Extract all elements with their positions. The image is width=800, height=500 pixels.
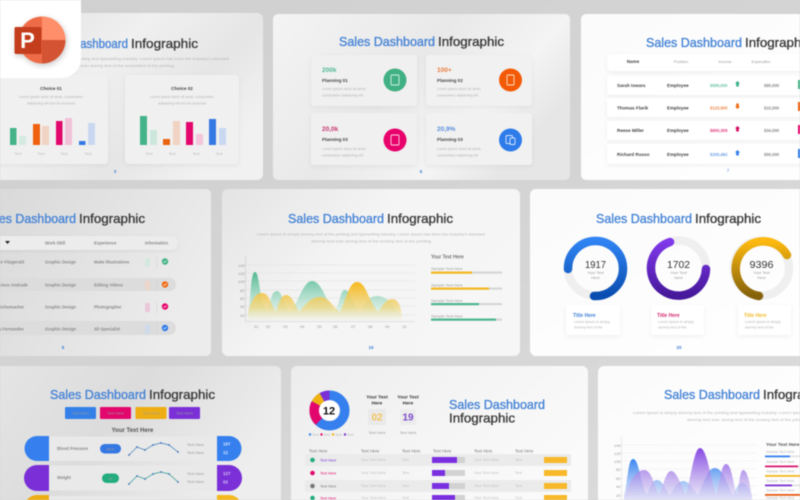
card: planning 02: Lorem ipsum dolor sit amet, bbox=[437, 87, 481, 91]
page number 8: 8 bbox=[62, 345, 65, 350]
bar chart: choice 01: Text bbox=[14, 151, 23, 156]
buttons row: Text Here bbox=[107, 410, 125, 416]
card: title here yellow: Title Here bbox=[744, 313, 767, 319]
card: title here yellow: Lorem Ipsum is simply bbox=[745, 320, 781, 324]
row: Fernandes bbox=[0, 321, 176, 335]
area chart: 80 bbox=[616, 467, 621, 472]
progress list: Sample Text Here bbox=[766, 479, 794, 483]
card: title here pink: Title Here bbox=[657, 313, 680, 319]
title: slide area: Sales Dashboard bbox=[664, 388, 760, 402]
title: slide 6 bbox=[339, 35, 504, 49]
row: Richard Russo bbox=[607, 144, 800, 164]
row: blood pressure: Text Here bbox=[187, 450, 205, 455]
table header: Income bbox=[718, 59, 732, 64]
panel: employee income table slide bbox=[581, 14, 800, 180]
icon: pink circle tablet bbox=[384, 128, 406, 152]
table: Text bbox=[402, 484, 410, 488]
area chart: 03 bbox=[283, 324, 288, 329]
row: Sarah Iswara bbox=[607, 76, 800, 95]
panel: planning cards slide bbox=[273, 14, 570, 180]
row: Richard Russo: Richard Russo bbox=[617, 152, 650, 157]
panel: area chart slide bbox=[222, 189, 520, 356]
subtitle text: dummy text ever during text of the scramy text of the printing bbox=[687, 418, 800, 422]
row: Fernandes: 3D Specialist bbox=[94, 326, 121, 332]
row: blood pressure: 197 bbox=[223, 442, 231, 446]
title: slide 20 bbox=[596, 212, 761, 226]
logo badge: PowerPoint bbox=[0, 0, 81, 78]
title: slide 14: Sales Dashboard bbox=[288, 212, 384, 226]
card: planning 01: Planning 01 bbox=[322, 78, 348, 83]
subtitle text bbox=[257, 232, 485, 244]
area chart: 06 bbox=[333, 324, 338, 329]
donut: 9396: Here bbox=[757, 275, 767, 280]
subtitle text bbox=[633, 411, 800, 422]
donut: 9396: 9396 bbox=[750, 260, 774, 271]
legend: Text bbox=[312, 433, 319, 437]
card: choice 01: adipiscing elit sed do eiusmod bbox=[27, 102, 75, 106]
legend bbox=[309, 433, 354, 437]
panel: purple area chart slide bbox=[598, 366, 800, 500]
row: Thomas Flarik: Thomas Flarik bbox=[617, 106, 649, 110]
icon: orange circle phone bbox=[499, 68, 522, 92]
area chart: 10 bbox=[402, 324, 407, 329]
stat: 19: Here bbox=[403, 400, 414, 406]
area chart: 140 bbox=[614, 443, 621, 448]
panel: team skills table slide bbox=[0, 189, 211, 356]
area chart: 40 bbox=[616, 484, 621, 489]
icon: sort triangle bbox=[5, 241, 10, 244]
buttons row bbox=[65, 407, 200, 419]
table: Text Here bbox=[320, 458, 336, 462]
stat: 19: Your Text bbox=[397, 394, 419, 400]
bar chart: choice 02: Text bbox=[192, 151, 201, 156]
table header: Expenditur bbox=[751, 59, 771, 64]
title: slide 7: Sales Dashboard bbox=[646, 36, 742, 50]
row: blood pressure: Blood Pressure bbox=[57, 446, 89, 451]
row: weight: 127 bbox=[223, 471, 231, 476]
title: slide 6: Infographic bbox=[438, 35, 504, 49]
row: Schumacher: Graphic Design bbox=[45, 304, 76, 310]
card: choice 01: Choice 01 bbox=[40, 86, 62, 91]
donut: 1917: 1917 bbox=[585, 260, 606, 271]
donut: 1702 bbox=[651, 240, 706, 296]
card: choice 01 bbox=[0, 75, 108, 164]
progress list: Sample Text Here bbox=[431, 298, 463, 303]
bar chart: choice 01: Text bbox=[37, 151, 46, 156]
table header: Name bbox=[627, 59, 640, 64]
card: planning 03: Lorem ipsum dolor sit amet, bbox=[322, 147, 366, 151]
title: two lines bbox=[449, 398, 545, 426]
area chart: 60 bbox=[240, 296, 245, 301]
line chart: blood pressure bbox=[128, 442, 179, 456]
table: Text Here bbox=[361, 448, 380, 454]
title: slide metrics bbox=[50, 388, 215, 402]
progress list: Your Text Here bbox=[431, 254, 464, 260]
donut chart: 12: 12 bbox=[323, 406, 335, 418]
table: Text Here bbox=[474, 448, 493, 454]
area chart: 60 bbox=[616, 476, 621, 481]
card: planning 04: Lorem ipsum dolor sit amet, bbox=[437, 147, 481, 151]
row: Fitzgerald bbox=[0, 257, 168, 268]
row: weight: 45 bbox=[108, 476, 113, 481]
row: Sarah Iswara: Sarah Iswara bbox=[617, 83, 646, 88]
subtitle text: text ever during text of the scrambled of the printing bbox=[72, 64, 174, 68]
table: Text bbox=[515, 496, 523, 500]
area chart: 140 bbox=[238, 263, 245, 268]
bar chart: choice 01 bbox=[10, 118, 95, 156]
area chart: 01 bbox=[254, 324, 259, 329]
subtitle text: printing and typesetting industry. Lorem Ipsum has been the industry's standard bbox=[76, 57, 229, 61]
progress list bbox=[765, 442, 800, 500]
card: planning 04: 20,9% bbox=[437, 126, 456, 133]
bar chart: choice 02: Text bbox=[168, 151, 177, 156]
row: Fitzgerald: Graphic Design bbox=[45, 260, 76, 264]
row: Schumacher bbox=[0, 302, 168, 313]
area chart: 20 bbox=[240, 313, 245, 318]
card: choice 02 bbox=[125, 75, 239, 164]
title: two lines: Infographic bbox=[449, 412, 515, 426]
table: Text Here bbox=[402, 448, 421, 454]
card: planning 02: consectetur adipiscing elit bbox=[437, 94, 478, 98]
area chart: 80 bbox=[240, 288, 245, 293]
area chart: 08 bbox=[368, 324, 373, 329]
donut: 1917 bbox=[568, 240, 623, 296]
row: Reese Miller: $600,309 bbox=[710, 128, 728, 133]
table: Your Text Here bbox=[474, 471, 499, 475]
stat: 02: 02 bbox=[371, 412, 383, 424]
table: Your Text Here bbox=[361, 484, 386, 488]
donut: 1917: Here bbox=[591, 275, 601, 280]
title: slide 20: Sales Dashboard bbox=[596, 212, 692, 226]
progress list: Sample Text Here bbox=[766, 450, 794, 454]
row: weight: Text Here bbox=[187, 471, 205, 476]
row: Sarah Iswara: Employee bbox=[667, 83, 689, 88]
table: Text Here bbox=[320, 484, 336, 488]
panel: health metrics slide bbox=[0, 366, 281, 500]
stat: 02 bbox=[366, 394, 388, 435]
page number 20: 20 bbox=[676, 345, 682, 350]
card: planning 03 bbox=[311, 113, 417, 165]
card: title here blue: dummy text of the bbox=[574, 326, 603, 330]
row: Fernandes: Graphic Design bbox=[45, 326, 76, 332]
area chart: 120 bbox=[238, 271, 245, 276]
card: planning 01: consectetur adipiscing elit bbox=[322, 94, 363, 98]
row: third metric bbox=[24, 495, 242, 500]
progress list: Your Text Here bbox=[766, 442, 800, 448]
panel: choice bar charts slide bbox=[0, 13, 263, 180]
title: slide 20: Infographic bbox=[695, 212, 761, 226]
panel: donut and table slide bbox=[291, 366, 588, 500]
table: Your Text Here bbox=[361, 496, 386, 500]
card: title here blue: Lorem Ipsum is simply bbox=[574, 320, 610, 324]
row: Richard Russo: $50,000 bbox=[764, 152, 780, 157]
row: Andrade bbox=[0, 278, 176, 291]
table header pill bbox=[0, 236, 178, 250]
card: planning 04 bbox=[426, 113, 532, 165]
table bbox=[305, 448, 571, 500]
subtitle text: dummy text ever during text of the scramy text of the printing bbox=[311, 240, 431, 244]
area chart bbox=[614, 436, 757, 500]
stat: 02: Here bbox=[372, 400, 383, 406]
card: choice 02: Lorem ipsum dolor sit amet, consectetur bbox=[150, 95, 215, 99]
area chart: 100 bbox=[238, 279, 245, 284]
donut: 9396 bbox=[734, 240, 789, 296]
title: slide 8 bbox=[0, 212, 145, 226]
title: slide metrics: Sales Dashboard bbox=[50, 388, 146, 402]
subtitle text: Lorem Ipsum is simply dummy text of the printing and typesetting industry. Lorem Ipsum has been the industry's standard bbox=[257, 232, 485, 236]
area chart: 120 bbox=[614, 451, 621, 456]
page number 16: 16 bbox=[368, 345, 374, 350]
row: Sarah Iswara: $80,000 bbox=[764, 83, 780, 88]
area chart: 02 bbox=[266, 324, 271, 329]
title: two lines: Sales Dashboard bbox=[449, 398, 545, 412]
icon: up arrow pink bbox=[735, 126, 740, 132]
icon: PowerPoint logo: P bbox=[20, 28, 35, 53]
card: title here blue: Title Here bbox=[573, 313, 596, 319]
card: planning 01: 200k bbox=[322, 67, 337, 74]
table: Text Here bbox=[433, 448, 452, 454]
stat: 02: Text Here bbox=[368, 430, 386, 435]
icon: down arrow orange bbox=[735, 104, 740, 109]
row: weight: Text Here bbox=[187, 479, 205, 484]
row: Richard Russo: $100,492 bbox=[710, 152, 728, 157]
table: Text bbox=[515, 484, 523, 488]
table: Text bbox=[402, 471, 410, 475]
icon: up arrow blue bbox=[735, 150, 740, 156]
title: slide 14: Infographic bbox=[387, 212, 453, 226]
card: planning 03: 20,0k bbox=[322, 126, 339, 133]
card: title here yellow bbox=[738, 305, 791, 335]
card: choice 01: Lorem ipsum dolor sit amet, consectetur bbox=[19, 95, 84, 99]
row: Thomas Flarik bbox=[607, 98, 800, 117]
legend: Text bbox=[324, 433, 330, 437]
progress list: Sample Text Here bbox=[766, 488, 794, 492]
table: Text bbox=[402, 458, 410, 462]
bar chart: choice 02: Text bbox=[215, 151, 224, 156]
subtitle text bbox=[72, 57, 229, 68]
icon: up arrow green bbox=[735, 81, 740, 86]
row: Sarah Iswara: $595,000 bbox=[710, 83, 728, 88]
row: Andrade: Graphic Design bbox=[45, 282, 76, 288]
progress list: Sample Text Here bbox=[431, 282, 463, 288]
legend: Text bbox=[347, 433, 354, 437]
row: blood pressure: 12 bbox=[223, 450, 229, 455]
row: Reese Miller: Employee bbox=[667, 128, 689, 133]
row: Schumacher: Photographer bbox=[94, 304, 122, 310]
row: Reese Miller: Reese Miller bbox=[617, 128, 644, 133]
table: Your Text Here bbox=[474, 458, 499, 462]
card: planning 01 bbox=[311, 55, 417, 106]
area chart: 04 bbox=[300, 324, 305, 329]
row: Thomas Flarik: $10,000 bbox=[764, 106, 780, 110]
title: slide 8: Infographic bbox=[79, 212, 145, 226]
row: weight: 02 bbox=[223, 480, 229, 484]
subheading: Your Text Here bbox=[112, 428, 154, 434]
progress list: Sample Text Here bbox=[431, 314, 463, 318]
icon: blue circle devices bbox=[499, 128, 522, 152]
stat: 02: Your Text bbox=[366, 394, 388, 400]
table: Text bbox=[515, 458, 523, 462]
title: slide metrics: Infographic bbox=[149, 388, 215, 402]
card: title here blue bbox=[566, 305, 620, 335]
card: planning 02: 100+ bbox=[437, 67, 452, 74]
area chart bbox=[238, 256, 415, 329]
page number 6: 6 bbox=[420, 169, 423, 174]
row: Thomas Flarik: Employee bbox=[667, 106, 689, 110]
card: planning 03: consectetur adipiscing elit bbox=[322, 154, 363, 158]
bar chart: choice 01: Text bbox=[60, 151, 69, 156]
legend: Text bbox=[335, 433, 342, 437]
icon: green circle document bbox=[384, 68, 406, 92]
panel: donut progress slide bbox=[530, 189, 800, 356]
row: Reese Miller: $34,000 bbox=[764, 128, 780, 133]
line chart: weight bbox=[128, 471, 179, 485]
table: Text bbox=[515, 471, 523, 475]
table: Text Here bbox=[309, 448, 328, 454]
row: weight: Weight bbox=[57, 475, 71, 480]
area chart: 20 bbox=[616, 493, 621, 498]
page number 3: 3 bbox=[114, 169, 117, 174]
area chart: 100 bbox=[614, 459, 621, 464]
row: Thomas Flarik: $120,900 bbox=[710, 106, 728, 110]
row: Reese Miller bbox=[607, 121, 800, 140]
progress list: Sample Text Here bbox=[766, 460, 794, 464]
table: Text Here bbox=[515, 448, 534, 454]
donut: 9396: Your Text bbox=[753, 270, 771, 275]
title: slide 7 bbox=[646, 36, 800, 50]
page number 7: 7 bbox=[727, 168, 730, 173]
buttons row: Text Here bbox=[142, 410, 160, 416]
row: blood pressure bbox=[24, 436, 242, 461]
table header: Position bbox=[674, 59, 688, 64]
area chart: 40 bbox=[240, 304, 245, 309]
title: slide 3: Sales Dashboard bbox=[40, 37, 128, 51]
table header pill: Experience bbox=[94, 240, 117, 246]
row: Fitzgerald: Make Illustrations bbox=[94, 260, 130, 264]
bar chart: choice 02 bbox=[140, 116, 226, 156]
stat: 19 bbox=[397, 394, 419, 435]
row: blood pressure: 80% bbox=[106, 446, 115, 451]
card: choice 02: Choice 02 bbox=[171, 86, 193, 91]
title: slide 14 bbox=[288, 212, 453, 226]
card: planning 01: Lorem ipsum dolor sit amet, bbox=[322, 87, 366, 91]
table header pill: Information bbox=[145, 240, 168, 246]
card: planning 04: consectetur adipiscing elit bbox=[437, 154, 478, 158]
table: Your Text Here bbox=[361, 458, 386, 462]
row: Andrade: Editing Videos bbox=[94, 282, 124, 288]
table header bbox=[607, 54, 800, 71]
bar chart: choice 02: Text bbox=[145, 151, 154, 156]
stat: 19: Text Here bbox=[399, 430, 417, 435]
donut: 1917: Your Text bbox=[587, 270, 605, 275]
table header pill: Work Skill bbox=[45, 240, 65, 246]
card: choice 02: adipiscing elit sed do eiusmod bbox=[158, 102, 206, 106]
row: weight bbox=[24, 465, 242, 491]
buttons row: Text Here bbox=[72, 410, 90, 416]
progress list bbox=[431, 254, 502, 321]
table: Your Text Here bbox=[361, 471, 386, 475]
area chart: 07 bbox=[351, 324, 356, 329]
card: planning 03: Planning 03 bbox=[322, 137, 348, 142]
table: Text bbox=[402, 496, 410, 500]
card: title here pink: Lorem Ipsum is simply bbox=[658, 320, 694, 324]
stat: 19: 19 bbox=[402, 412, 414, 424]
card: title here pink: dummy text of the bbox=[658, 326, 687, 330]
card: title here pink bbox=[651, 305, 704, 335]
card: title here yellow: dummy text of the bbox=[745, 326, 774, 330]
title: slide 3 bbox=[40, 37, 198, 51]
title: slide 6: Sales Dashboard bbox=[339, 35, 435, 49]
table: Text Here bbox=[320, 472, 336, 476]
donut: 1702: 1702 bbox=[667, 260, 690, 271]
progress list: Sample Text Here bbox=[766, 470, 794, 474]
row: Richard Russo: Employee bbox=[667, 152, 689, 157]
buttons row: Text Here bbox=[176, 410, 194, 416]
area chart: 09 bbox=[385, 324, 390, 329]
area chart: 05 bbox=[317, 324, 322, 329]
table: Your Text Here bbox=[474, 496, 499, 500]
card: planning 04: Planning 03 bbox=[437, 137, 463, 142]
row: blood pressure: Text Here bbox=[187, 442, 205, 447]
progress list: Sample Text Here bbox=[766, 496, 794, 500]
donut: 1702: Your Text bbox=[670, 270, 688, 275]
progress list: Sample Text Here bbox=[431, 266, 463, 271]
bar chart: choice 01: Text bbox=[84, 151, 93, 156]
donut chart: 12 bbox=[314, 395, 345, 426]
card: planning 02 bbox=[426, 55, 532, 106]
donut: 1702: Here bbox=[674, 275, 684, 280]
subtitle text: Lorem Ipsum is simply dummy text of the printing and typesetting industry. Lorem Ipsum has bbox=[633, 411, 800, 415]
card: planning 02: Planning 02 bbox=[437, 78, 463, 83]
title: slide 3: Infographic bbox=[131, 37, 198, 51]
table: Your Text Here bbox=[474, 484, 499, 488]
